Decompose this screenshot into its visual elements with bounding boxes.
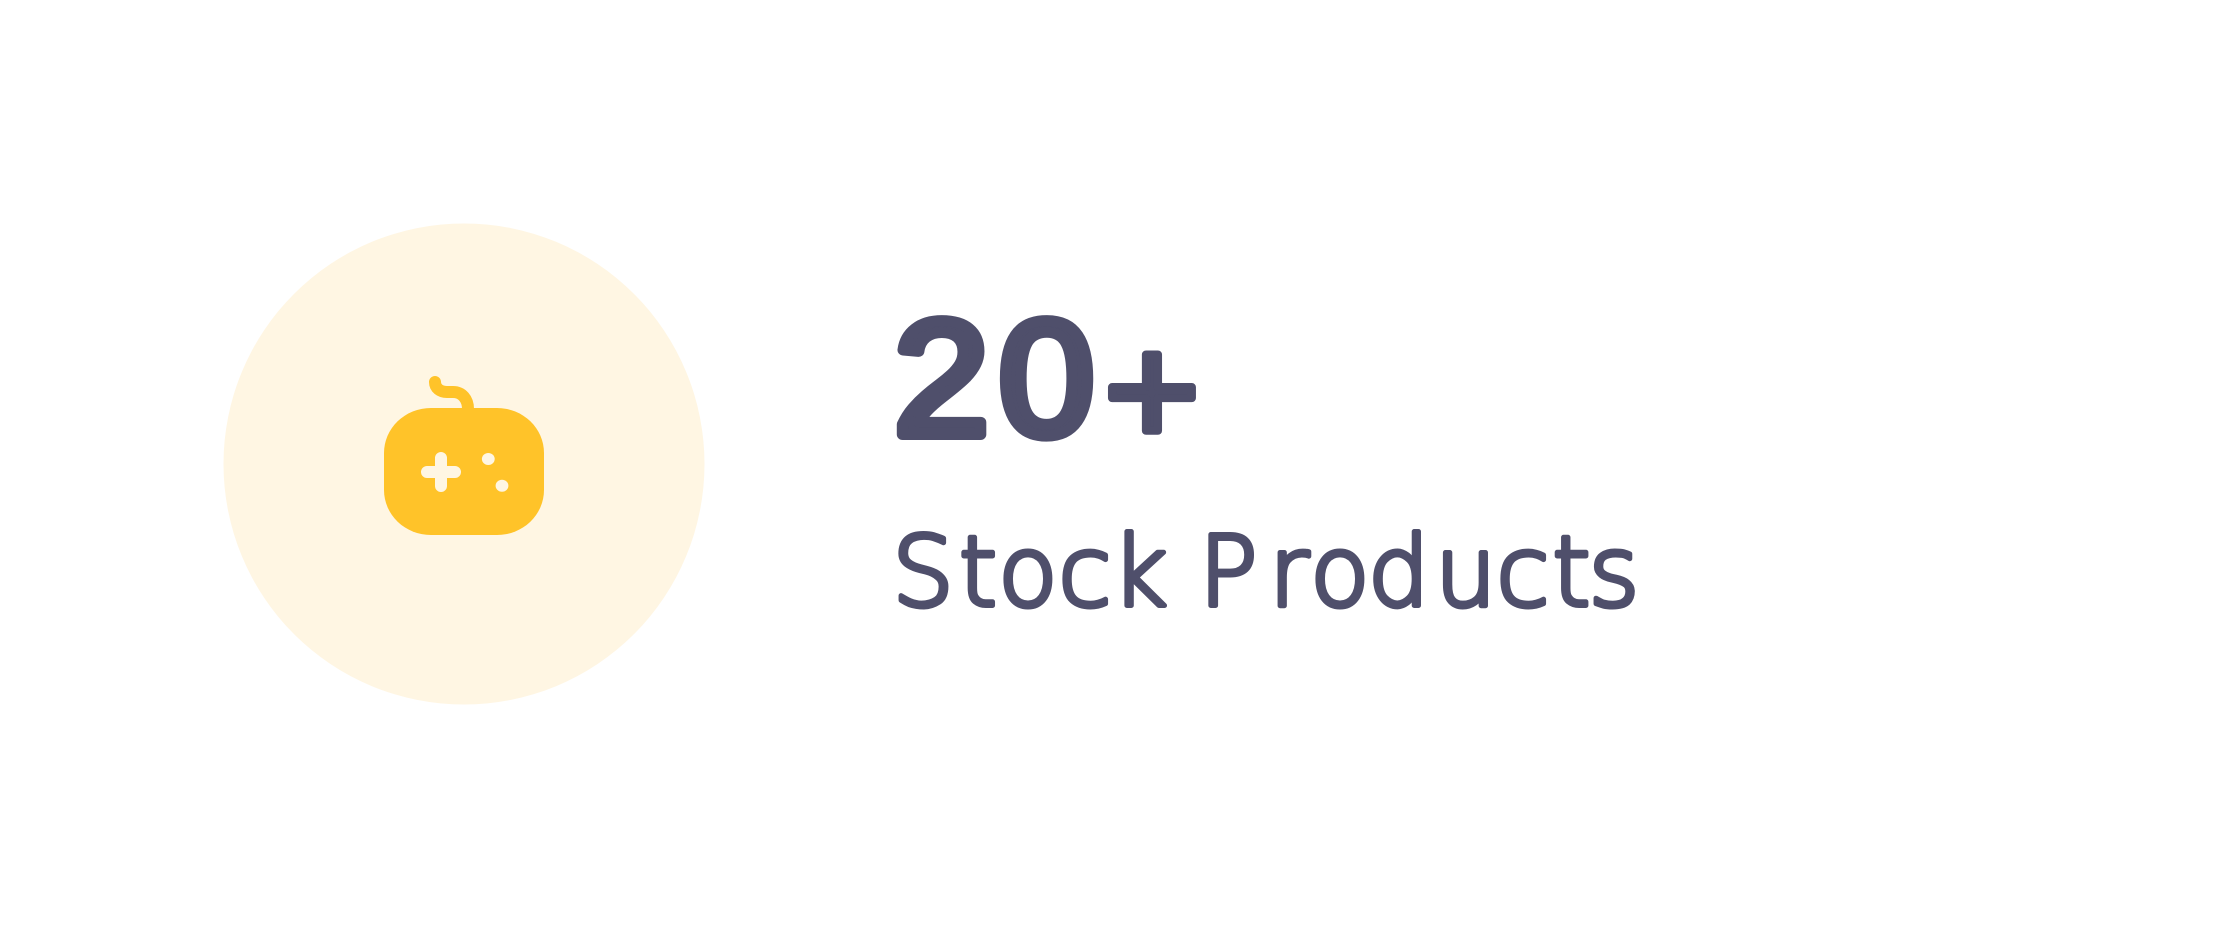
stat number: 20+ xyxy=(894,288,1200,478)
icon background circle xyxy=(224,224,704,704)
icon: game controller in circle xyxy=(224,224,704,704)
icon: game controller xyxy=(384,382,544,535)
stat label: Stock Products xyxy=(892,516,1639,628)
